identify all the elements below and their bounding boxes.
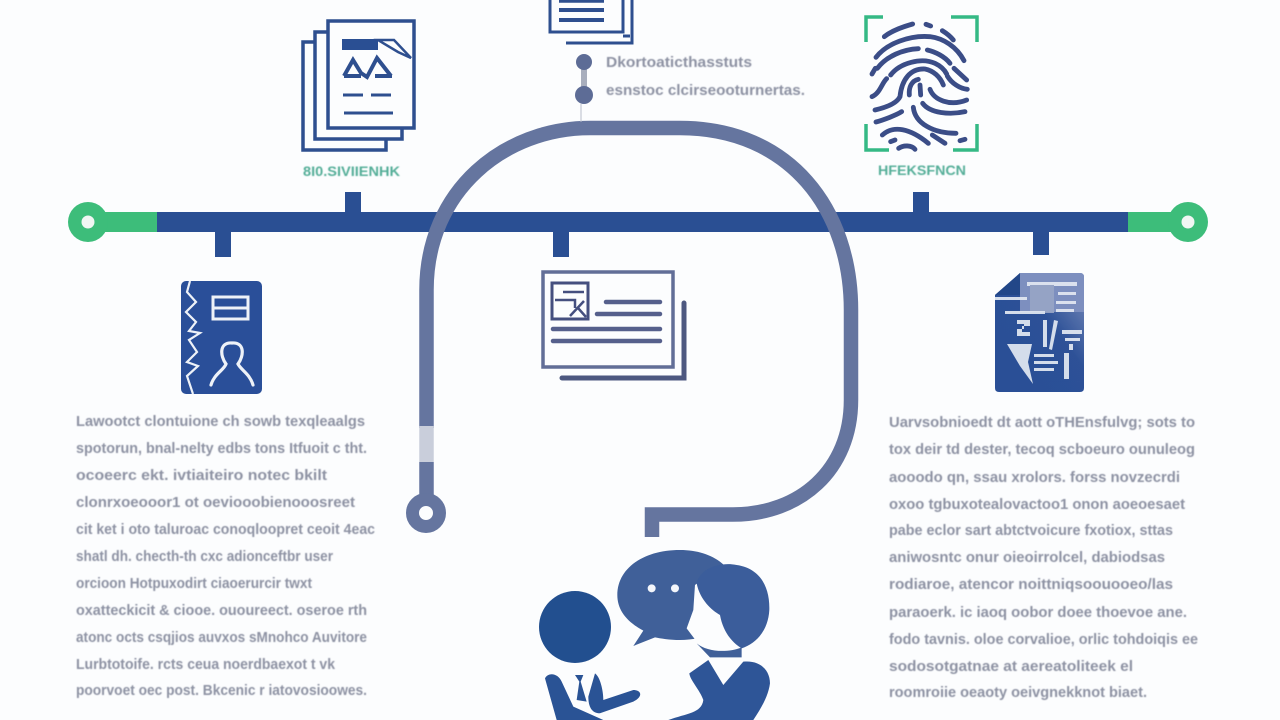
icon: top centre document	[550, 0, 632, 43]
left text block: cit ket i oto taluroac conoqloopret ceoit 4eac	[76, 521, 375, 538]
torn edge	[186, 281, 200, 394]
right text block	[889, 414, 1198, 701]
left person head	[539, 591, 611, 663]
right text block: rodiaroe, atencor noittniqsoouooeo/las	[889, 576, 1173, 593]
right text block: paraoerk. ic iaoq oobor doee thoevoe ane.	[889, 604, 1187, 621]
left person body	[545, 673, 640, 720]
right text block: pabe eclor sart abtctvoicure fxotiox, sttas	[889, 522, 1173, 539]
label: left top: 8I0.SIVIIENHK	[303, 163, 400, 179]
right person hair	[697, 564, 769, 648]
left text block: orcioon Hotpuxodirt ciaoerurcir twxt	[76, 575, 312, 592]
fingerprint ridges	[872, 24, 967, 149]
right text block: Uarvsobnioedt dt aott oTHEnsfulvg; sots to	[889, 414, 1195, 431]
icon: ID passport	[181, 281, 262, 394]
arch connector	[412, 128, 851, 537]
left text block: Lawootct clontuione ch sowb texqleaalgs	[76, 413, 365, 430]
left text block: atonc octs csqjios auvxos sMnohco Auvitore	[76, 629, 367, 646]
top centre text	[606, 54, 805, 99]
speech bubble	[545, 550, 770, 720]
left text block: shatl dh. checth-th cxc adionceftbr user	[76, 548, 333, 565]
right text block: aooodo qn, ssau xrolors. forss novzecrdi	[889, 469, 1180, 486]
left text block: Lurbtotoife. rcts ceua noerdbaexot t vk	[76, 656, 336, 673]
collar	[697, 643, 742, 657]
timeline stems	[215, 192, 1049, 257]
photo frame	[213, 297, 248, 319]
main timeline	[68, 192, 1208, 257]
right text block: oxoo tgbuxotealovactoo1 onon aoeoesaet	[889, 496, 1185, 513]
right person face	[687, 567, 753, 652]
left text block: ocoeerc ekt. ivtiaiteiro notec bkilt	[76, 467, 327, 484]
left text block: clonrxoeooor1 ot oeviooobienooosreet	[76, 494, 355, 511]
icon: stacked document	[303, 21, 414, 150]
left text block	[76, 413, 375, 699]
report marks	[995, 282, 1082, 384]
icon: two people talking	[539, 550, 770, 720]
top centre text: Dkortoaticthasstuts	[606, 54, 752, 71]
icon: ID card	[543, 272, 684, 378]
top light panel	[1020, 273, 1084, 312]
label: fingerprint: HFEKSFNCN	[878, 162, 966, 178]
left text block: spotorun, bnal-nelty edbs tons Itfuoit c tht.	[76, 440, 367, 457]
person outline	[211, 343, 253, 385]
right text block: sodosotgatnae at aereatoliteek el	[889, 658, 1133, 675]
right person body	[668, 660, 770, 720]
right text block: aniwosntc onur oieoirrolcel, dabiodsas	[889, 549, 1165, 566]
timeline bar	[157, 212, 1128, 232]
right text block: roomroiie oeaoty oeivgnekknot biaet.	[889, 684, 1147, 701]
top centre node connector	[575, 54, 593, 122]
right green end	[1128, 202, 1208, 242]
right text block: fodo tavnis. oloe corvalioe, orlic tohdoiqis ee	[889, 631, 1198, 648]
icon: report document	[995, 273, 1084, 392]
scan brackets	[866, 17, 977, 150]
icon: fingerprint	[866, 17, 977, 150]
left text block: oxatteckicit & ciooe. ououreect. oseroe rth	[76, 602, 367, 619]
left green end	[68, 202, 157, 242]
top centre text: esnstoc clcirseooturnertas.	[606, 82, 805, 99]
right text block: tox deir td dester, tecoq scboeuro ounuleog	[889, 441, 1195, 458]
folded corner	[995, 273, 1020, 295]
left text block: poorvoet oec post. Bkcenic r iatovosioowes.	[76, 682, 367, 699]
